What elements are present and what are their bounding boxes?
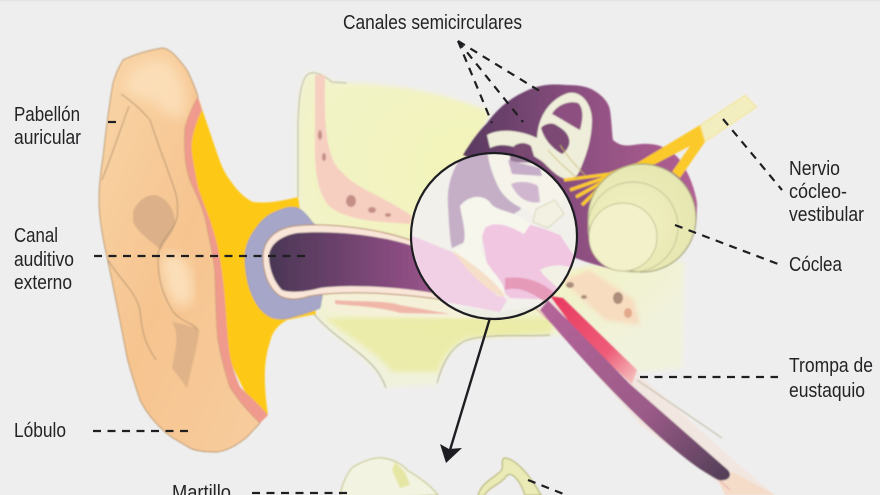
label: Canal auditivo externo <box>14 224 74 294</box>
illustration: temporal bone <box>298 73 684 388</box>
cream canals block <box>487 93 592 180</box>
highlights <box>125 60 186 118</box>
leader lines <box>93 41 782 495</box>
blue-gray ring <box>245 207 330 319</box>
cartilage: yellow <box>185 97 316 423</box>
pink band <box>185 97 268 423</box>
magnifier circle <box>410 152 578 320</box>
pink bone strip <box>315 75 412 224</box>
lower bone strip <box>323 292 500 318</box>
label: Pabellón auricular: auricular <box>14 126 81 149</box>
label: Canal auditivo externo: auditivo <box>14 248 74 271</box>
label: Pabellón auricular <box>14 103 81 149</box>
label: Lóbulo: Lóbulo <box>14 419 66 442</box>
label: Pabellón auricular: Pabellón <box>14 103 80 126</box>
arrow: magnifier to ossicles <box>440 318 490 463</box>
label: Nervio cócleo-vestibular: cócleo- <box>789 180 847 203</box>
label: Canales semicirculares: Canales semicirculares <box>343 11 522 34</box>
label: Trompa de eustaquio: eustaquio <box>789 379 865 402</box>
illustration: eustachian tube <box>530 292 775 495</box>
canal holes <box>552 102 582 130</box>
label: Canal auditivo externo: externo <box>14 271 72 294</box>
icon: incus <box>478 458 541 495</box>
icon: malleus <box>340 458 438 495</box>
pinna <box>99 48 260 452</box>
label: Cóclea: Cóclea <box>789 253 842 276</box>
illustration: ear canal <box>263 225 520 310</box>
lower right bone <box>562 270 640 325</box>
ossicles in lens <box>452 197 530 296</box>
nerve <box>600 95 757 182</box>
label: Trompa de eustaquio <box>789 354 873 402</box>
cream canals in lens <box>487 154 538 208</box>
label: Nervio cócleo-vestibular: vestibular <box>789 203 864 226</box>
label: Nervio cócleo-vestibular <box>789 157 864 226</box>
illustration: cochlea <box>588 164 696 272</box>
label: Canal auditivo externo: Canal <box>14 224 58 247</box>
concha <box>133 195 175 250</box>
illustration: outer ear <box>99 48 330 452</box>
folds <box>102 94 198 360</box>
label: Nervio cócleo-vestibular: Nervio <box>789 157 840 180</box>
illustration: vestibule and semicircular canals <box>463 84 757 270</box>
